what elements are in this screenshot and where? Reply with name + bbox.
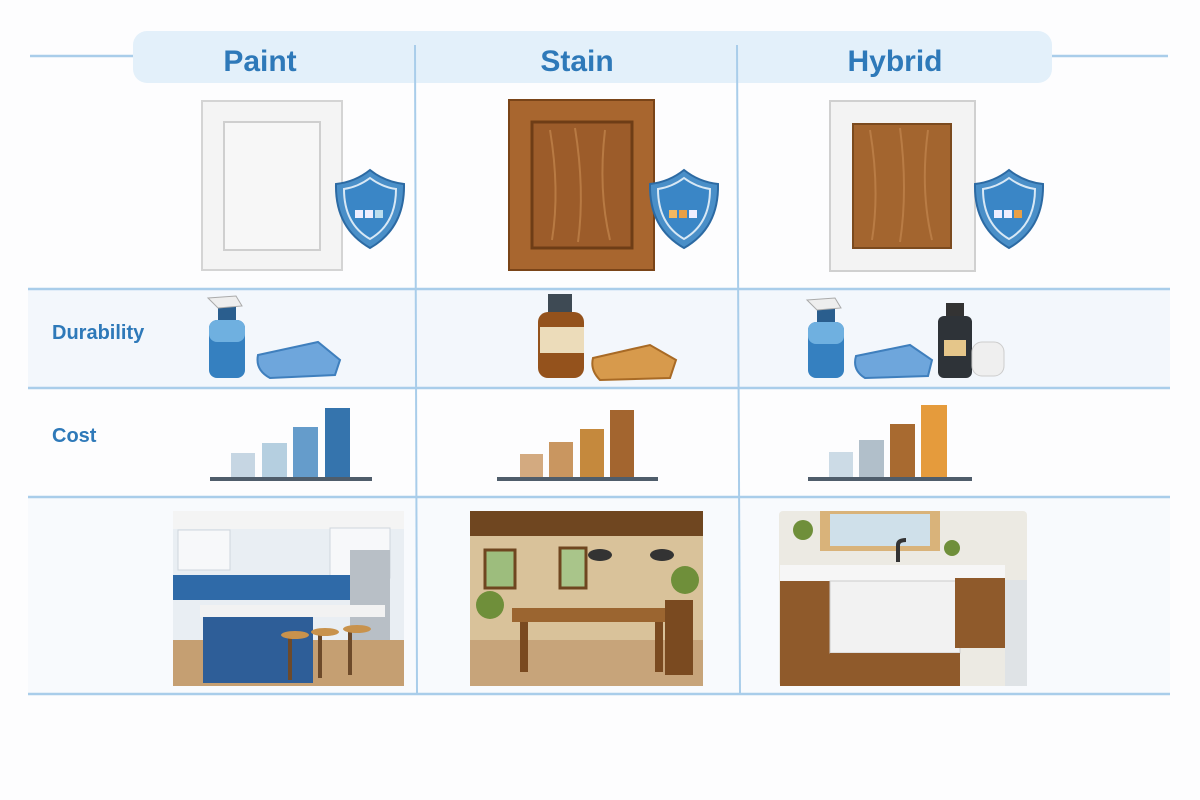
row backgrounds [28, 290, 1170, 388]
row label: Durability: Durability [52, 322, 145, 344]
bar chart: hybrid cost [808, 405, 972, 481]
bar chart: stain cost [497, 410, 658, 481]
icon: shields [336, 170, 1043, 248]
header bar: Stain [540, 45, 614, 78]
icon: hybrid door [830, 101, 975, 271]
grid lines [28, 56, 1170, 694]
row label: Cost: Cost [52, 425, 97, 447]
icon: paint durability spray + cloth [208, 296, 340, 378]
icon: paint door [202, 101, 342, 270]
photo: stained dining room [470, 511, 703, 686]
icon: stain door [509, 100, 654, 270]
header bar: Paint [223, 45, 297, 78]
photo: hybrid bathroom vanity [779, 511, 1027, 686]
icon: stain durability bottle + cloth [538, 294, 676, 380]
photo: painted kitchen [173, 511, 404, 686]
icon: hybrid durability products [807, 298, 1004, 378]
bar chart: paint cost [210, 408, 372, 481]
header bar [133, 31, 1052, 83]
header bar: Hybrid [847, 45, 943, 78]
